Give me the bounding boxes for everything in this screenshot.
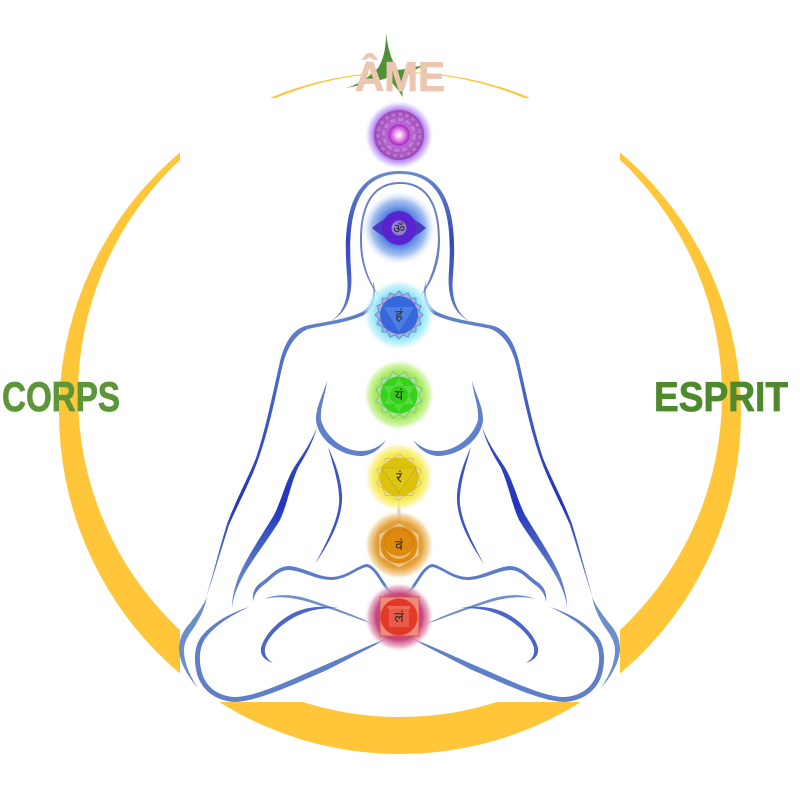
chakra: root [364, 582, 434, 652]
chakra: crown [364, 100, 434, 170]
chakra: heart [363, 359, 435, 431]
chakra: solar plexus [364, 442, 434, 512]
crescent ring [59, 72, 741, 754]
icon: green leaf star [346, 33, 424, 97]
chakra: sacral [364, 510, 434, 580]
chakra: throat: हं [395, 307, 403, 323]
left body lines [179, 280, 402, 702]
chakra: root: लं [394, 609, 404, 625]
meditating figure outline [179, 171, 620, 702]
connector between chakras [398, 495, 400, 523]
chakra: heart: यं [395, 387, 404, 403]
heading: ÂME: ÂME [355, 52, 445, 100]
right body lines [397, 280, 620, 702]
heading: CORPS: CORPS [2, 373, 120, 420]
chakra: third eye [361, 190, 437, 266]
chakra: throat [363, 279, 435, 351]
chakra: third eye: ॐ [393, 221, 405, 236]
chakra: sacral: वं [395, 537, 403, 553]
chakra: solar plexus: रं [396, 469, 402, 485]
hair outline [331, 171, 469, 321]
face outline [360, 182, 440, 303]
white panel behind figure [180, 98, 620, 702]
